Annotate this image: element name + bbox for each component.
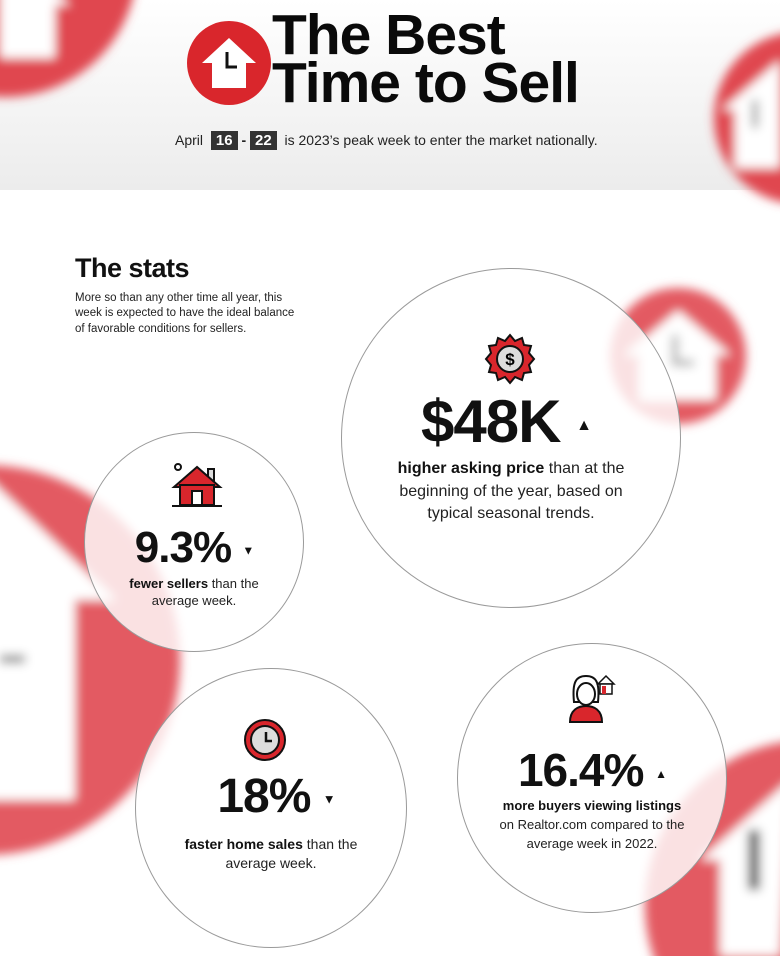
- number: 16.4% ▲: [518, 744, 666, 796]
- circle: $48K: [341, 268, 681, 608]
- number: 9.3% ▼: [135, 523, 253, 572]
- number: $48K ▲: [421, 388, 591, 455]
- title: Time to Sell: [272, 51, 579, 115]
- logo icon: [187, 21, 271, 105]
- icon: clock: [244, 719, 286, 761]
- description: more buyers viewing listings on Realtor.com compared to the average week in 2022.: [500, 798, 684, 851]
- stats intro text: More so than any other time all year, this week is expected to have the ideal balance of favorable conditions for sellers.: [75, 292, 294, 335]
- description: fewer sellers than the average week.: [129, 576, 259, 608]
- number: 18% ▼: [217, 770, 335, 823]
- icon: money badge: $: [505, 350, 515, 369]
- title: [272, 3, 579, 115]
- icon: house: [171, 463, 223, 507]
- circle: 18%: [135, 668, 407, 948]
- description: faster home sales than the average week.: [185, 836, 357, 871]
- header background: [0, 0, 780, 190]
- circle: 16.4%: [457, 643, 727, 913]
- subtitle with dates: 22: [255, 132, 272, 149]
- icon: buyer: [569, 675, 616, 723]
- circle: 9.3%: [84, 432, 304, 652]
- stats heading: The stats: [75, 253, 189, 283]
- icon: money badge: [484, 334, 536, 384]
- title: The Best: [272, 3, 505, 67]
- description: higher asking price than at the beginning of the year, based on typical seasonal trends.: [398, 460, 624, 522]
- subtitle with dates: April - is 2023’s peak week to enter the market nationally.: [175, 132, 598, 148]
- subtitle with dates: 16: [216, 132, 233, 149]
